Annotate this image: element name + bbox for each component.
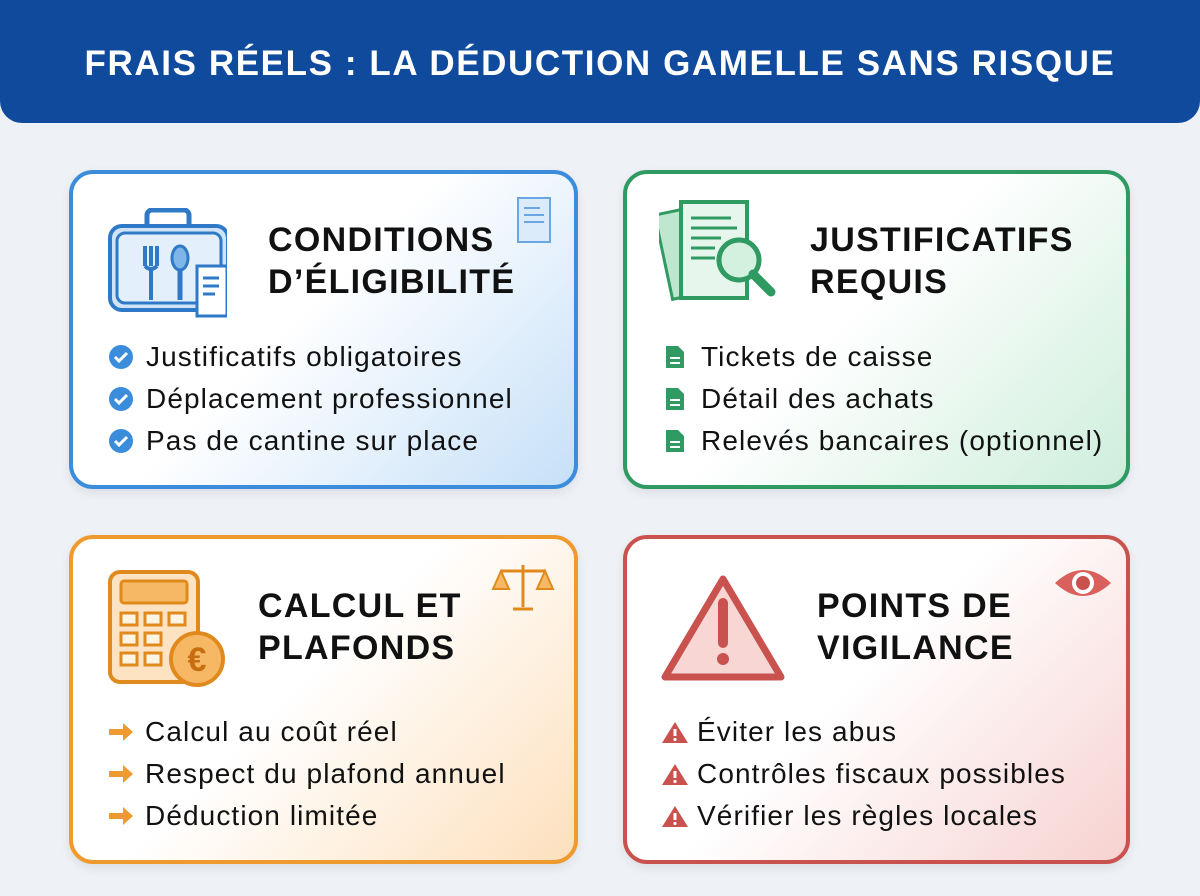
list: Éviter les abus xyxy=(697,716,897,747)
heading: JUSTIFICATIFS xyxy=(810,221,1074,259)
list xyxy=(666,341,1103,456)
list: Contrôles fiscaux possibles xyxy=(697,758,1066,789)
icon: warning triangle xyxy=(662,576,784,680)
icon: scales xyxy=(492,565,554,610)
panel: conditions xyxy=(69,170,578,489)
list: Vérifier les règles locales xyxy=(697,800,1038,831)
panel: vigilance xyxy=(623,535,1130,864)
heading: PLAFONDS xyxy=(258,629,455,667)
heading: CONDITIONS xyxy=(268,221,494,259)
list xyxy=(109,716,506,831)
icon: lunchbox xyxy=(108,208,227,318)
icon: calculator euro xyxy=(108,570,225,687)
list: Déplacement professionnel xyxy=(146,383,513,414)
icon: receipt small xyxy=(517,197,551,243)
header: FRAIS RÉELS : LA DÉDUCTION GAMELLE SANS RISQUE xyxy=(85,44,1115,83)
panel: justificatifs xyxy=(623,170,1130,489)
heading: CALCUL ET xyxy=(258,587,462,625)
icon: calculator euro: € xyxy=(188,641,207,679)
heading xyxy=(810,221,1074,301)
list: Tickets de caisse xyxy=(701,341,933,372)
list: Détail des achats xyxy=(701,383,934,414)
icon: eye xyxy=(1055,570,1111,596)
heading xyxy=(817,587,1014,667)
header xyxy=(0,0,1200,123)
heading: POINTS DE xyxy=(817,587,1012,625)
list: Respect du plafond annuel xyxy=(145,758,506,789)
list: Calcul au coût réel xyxy=(145,716,398,747)
heading: REQUIS xyxy=(810,263,948,301)
list xyxy=(662,716,1066,831)
heading: VIGILANCE xyxy=(817,629,1014,667)
list: Relevés bancaires (optionnel) xyxy=(701,425,1103,456)
panel: calcul xyxy=(69,535,578,864)
heading: D’ÉLIGIBILITÉ xyxy=(268,263,515,301)
list: Déduction limitée xyxy=(145,800,378,831)
icon: documents magnifier xyxy=(659,200,776,302)
list: Justificatifs obligatoires xyxy=(146,341,463,372)
list: Pas de cantine sur place xyxy=(146,425,479,456)
heading xyxy=(268,221,515,301)
list xyxy=(109,341,513,456)
heading xyxy=(258,587,462,667)
